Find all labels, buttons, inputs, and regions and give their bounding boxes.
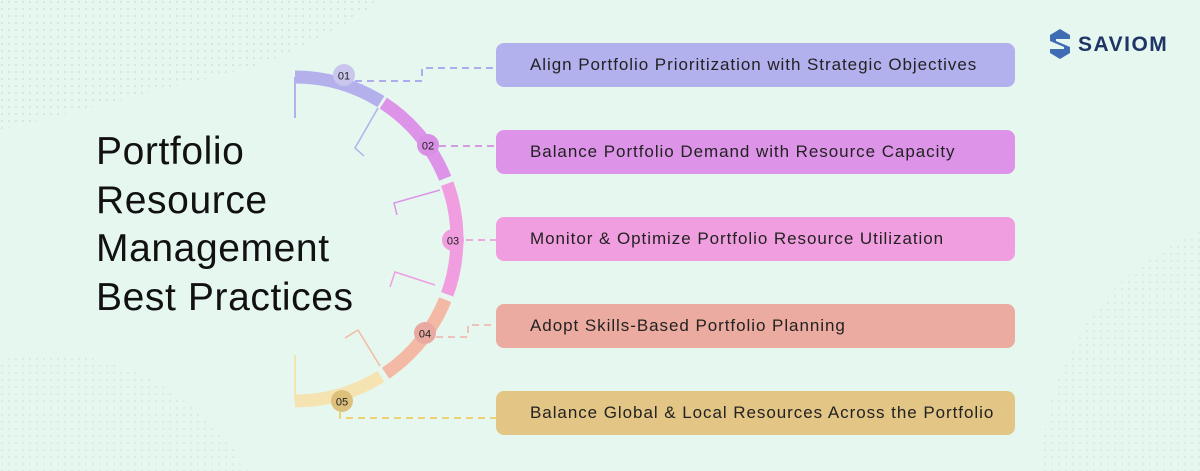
title: Best Practices [96, 276, 354, 318]
title: Resource [96, 178, 268, 222]
segment 2 [383, 103, 445, 215]
segment 4 [345, 300, 445, 373]
box 01 [496, 43, 1015, 87]
badge 02 [417, 134, 439, 156]
connector 05 [340, 412, 496, 418]
badge 05 [331, 390, 353, 412]
logo [1050, 29, 1168, 59]
box 02: Balance Portfolio Demand with Resource Capacity [530, 142, 955, 161]
badge 03 [442, 229, 464, 251]
box 05: Balance Global & Local Resources Across the Portfolio [530, 403, 994, 422]
title: Portfolio [96, 130, 244, 173]
badge 05: 05 [336, 396, 348, 408]
box 03 [496, 217, 1015, 261]
logo: SAVIOM [1078, 33, 1168, 56]
connector 01 [355, 68, 496, 81]
box 04: Adopt Skills-Based Portfolio Planning [530, 316, 846, 335]
badge 03: 03 [447, 236, 459, 248]
connector 03 [466, 239, 496, 241]
box 02 [496, 130, 1015, 174]
badge 04 [414, 322, 436, 344]
box 03: Monitor & Optimize Portfolio Resource Utilization [530, 229, 944, 248]
segment 1 [295, 77, 381, 156]
segment 5 [295, 355, 381, 401]
badge 02: 02 [422, 140, 434, 152]
badge 01: 01 [338, 70, 350, 82]
box 01: Align Portfolio Prioritization with Strategic Objectives [530, 55, 977, 74]
connector 04 [436, 325, 496, 337]
box 04 [496, 304, 1015, 348]
badge 01 [333, 64, 355, 86]
badge 04: 04 [419, 328, 431, 340]
title: Management [96, 227, 330, 270]
box 05 [496, 391, 1015, 435]
segment 3 [390, 184, 457, 294]
title [96, 130, 354, 318]
connector 02 [439, 145, 496, 147]
